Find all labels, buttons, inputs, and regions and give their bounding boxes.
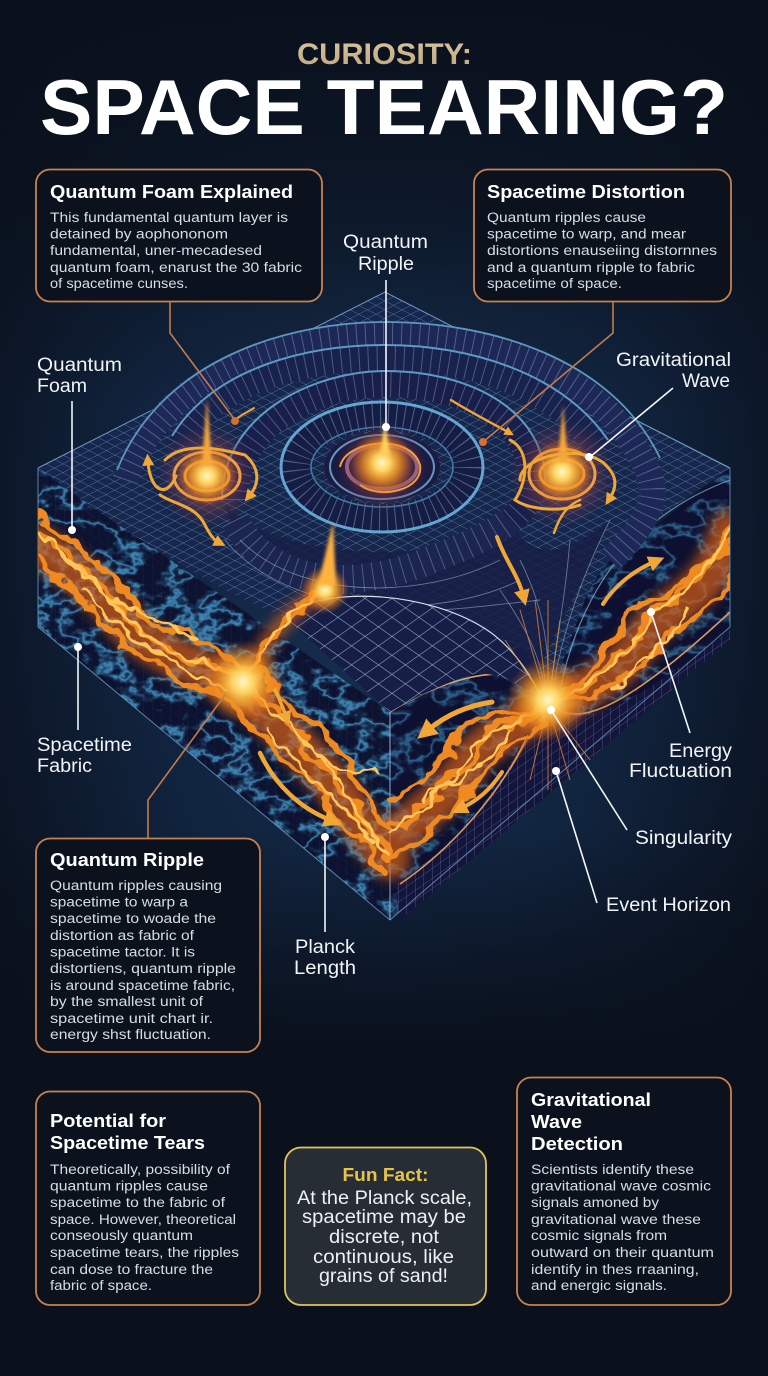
- panel: Quantum Foam Explained: This fundamental quantum layer is: [50, 210, 288, 225]
- label: Spacetime Fabric: Fabric: [37, 756, 92, 777]
- panel: Quantum Ripple: is around spacetime fabric,: [50, 978, 235, 993]
- label: Quantum Foam: [37, 355, 122, 534]
- label: Quantum Ripple: Quantum: [343, 232, 428, 253]
- lower funnel grid band: [390, 480, 730, 920]
- label: Quantum Foam: Foam: [37, 376, 87, 397]
- panel: Potential for Spacetime Tears: Spacetime Tears: [50, 1133, 205, 1153]
- warped lattice curves: [225, 520, 610, 695]
- panel: Quantum Foam Explained: fundamental, uner-mecadesed: [50, 243, 262, 258]
- panel: Fun Fact: spacetime may be: [302, 1207, 466, 1228]
- energy flames: [38, 515, 730, 875]
- label: Quantum Ripple: [343, 232, 428, 431]
- panel: Spacetime Distortion: Quantum ripples cause: [487, 210, 646, 225]
- label: Gravitational Wave: Wave: [682, 371, 730, 392]
- label: Energy Fluctuation: Energy: [669, 741, 733, 762]
- panel: Potential for Spacetime Tears: can dose to fracture the: [50, 1262, 213, 1277]
- panel: Fun Fact: [285, 1148, 486, 1305]
- panel: Quantum Ripple: Quantum Ripple: [50, 850, 204, 870]
- title: CURIOSITY:: [297, 38, 472, 71]
- left side face: foam veins: [38, 468, 390, 920]
- panel: Fun Fact: grains of sand!: [319, 1266, 448, 1287]
- panel: Potential for Spacetime Tears: space. However, theoretical: [50, 1212, 236, 1227]
- panel: Spacetime Distortion: and a quantum ripple to fabric: [487, 260, 695, 275]
- panel: Potential for Spacetime Tears: Theoretically, possibility of: [50, 1162, 230, 1177]
- panel: Quantum Foam Explained: of spacetime cunses.: [50, 276, 188, 291]
- label: Planck Length: [294, 833, 356, 979]
- panel: Gravitational Wave Detection: cosmic signals from: [531, 1228, 667, 1243]
- panel: Spacetime Distortion: spacetime of space.: [487, 276, 622, 291]
- panel: Quantum Ripple: distortiens, quantum ripple: [50, 961, 236, 976]
- folded spacetime sheet: [284, 596, 544, 712]
- label: Planck Length: Planck: [295, 937, 356, 958]
- panel: Gravitational Wave Detection: [517, 1078, 731, 1305]
- label: Spacetime Fabric: [37, 643, 132, 777]
- panel: Fun Fact: Fun Fact:: [342, 1165, 428, 1185]
- title: SPACE TEARING?: [40, 63, 728, 151]
- panel: Potential for Spacetime Tears: Potential for: [50, 1111, 166, 1131]
- panel: Spacetime Distortion: Spacetime Distortion: [487, 182, 685, 202]
- label: Gravitational Wave: Gravitational: [616, 350, 731, 371]
- panel: Gravitational Wave Detection: Gravitational: [531, 1090, 651, 1110]
- panel: Gravitational Wave Detection: Wave: [531, 1112, 582, 1132]
- panel: Quantum Ripple: [36, 838, 260, 1052]
- panel: Spacetime Distortion: [474, 170, 731, 302]
- panel: Potential for Spacetime Tears: spacetime tears, the ripples: [50, 1245, 239, 1260]
- panel: Quantum Foam Explained: quantum foam, enarust the 30 fabric: [50, 260, 302, 275]
- label: Energy Fluctuation: [629, 608, 733, 782]
- label: Energy Fluctuation: Fluctuation: [629, 761, 732, 782]
- panel: Gravitational Wave Detection: Detection: [531, 1134, 623, 1154]
- label: Planck Length: Length: [294, 958, 356, 979]
- label: Spacetime Fabric: Spacetime: [37, 735, 132, 756]
- panel: Fun Fact: At the Planck scale,: [297, 1188, 472, 1209]
- panel: Fun Fact: discrete, not: [329, 1227, 440, 1248]
- panel: Gravitational Wave Detection: gravitational wave these: [531, 1212, 701, 1227]
- panel: Quantum Ripple: by the smallest unit of: [50, 994, 203, 1009]
- panel: Quantum Ripple: spacetime unit chart ir.: [50, 1011, 213, 1026]
- label: Singularity: [547, 706, 733, 849]
- vortices and energy glows: [155, 398, 616, 742]
- panel: Potential for Spacetime Tears: fabric of space.: [50, 1278, 152, 1293]
- panel: Fun Fact: continuous, like: [313, 1247, 454, 1268]
- panel: Quantum Foam Explained: [36, 170, 322, 302]
- panel: Spacetime Distortion: spacetime to warp, and mear: [487, 227, 687, 242]
- funnel rays: [505, 600, 590, 790]
- panel: Potential for Spacetime Tears: [36, 1092, 260, 1305]
- top face: warped grid surface: [38, 292, 730, 920]
- panel: Quantum Ripple: spacetime to warp a: [50, 895, 189, 910]
- panel: Quantum Ripple: Quantum ripples causing: [50, 878, 222, 893]
- panel: Gravitational Wave Detection: outward on their quantum: [531, 1245, 714, 1260]
- panel: Potential for Spacetime Tears: spacetime to the fabric of: [50, 1195, 225, 1210]
- panel: Quantum Foam Explained: Quantum Foam Explained: [50, 182, 293, 202]
- panel: Potential for Spacetime Tears: conseously quantum: [50, 1228, 193, 1243]
- label: Quantum Ripple: Ripple: [358, 254, 414, 275]
- right side face: foam veins: [390, 468, 730, 920]
- panel: Gravitational Wave Detection: gravitational wave cosmic: [531, 1179, 711, 1194]
- label: Quantum Foam: Quantum: [37, 355, 122, 376]
- label: Event Horizon: [552, 767, 731, 916]
- label: Gravitational Wave: [585, 350, 731, 461]
- panel: Quantum Ripple: energy shst fluctuation.: [50, 1027, 211, 1042]
- panel: Quantum Ripple: distortion as fabric of: [50, 928, 194, 943]
- label: Event Horizon: Event Horizon: [606, 895, 731, 916]
- panel: Gravitational Wave Detection: identify in thes rraaning,: [531, 1262, 699, 1277]
- panel: Quantum Foam Explained: detained by aophononom: [50, 227, 228, 242]
- panel: Gravitational Wave Detection: Scientists identify these: [531, 1162, 694, 1177]
- concentric ripple rings: [117, 322, 660, 579]
- dark warped trough below the rings: [225, 505, 610, 680]
- panel: Gravitational Wave Detection: signals amoned by: [531, 1195, 659, 1210]
- spacetime block diagram: [38, 292, 730, 920]
- panel: Spacetime Distortion: distortions enauseiing distornnes: [487, 243, 717, 258]
- panel: Gravitational Wave Detection: and energic signals.: [531, 1278, 667, 1293]
- panel: Quantum Ripple: spacetime tactor. It is: [50, 945, 195, 960]
- orange connector lines: [148, 302, 613, 838]
- panel: Potential for Spacetime Tears: quantum ripples cause: [50, 1179, 208, 1194]
- panel: Quantum Ripple: spacetime to woade the: [50, 911, 216, 926]
- label: Singularity: Singularity: [635, 828, 733, 849]
- flow arrows: [148, 400, 654, 820]
